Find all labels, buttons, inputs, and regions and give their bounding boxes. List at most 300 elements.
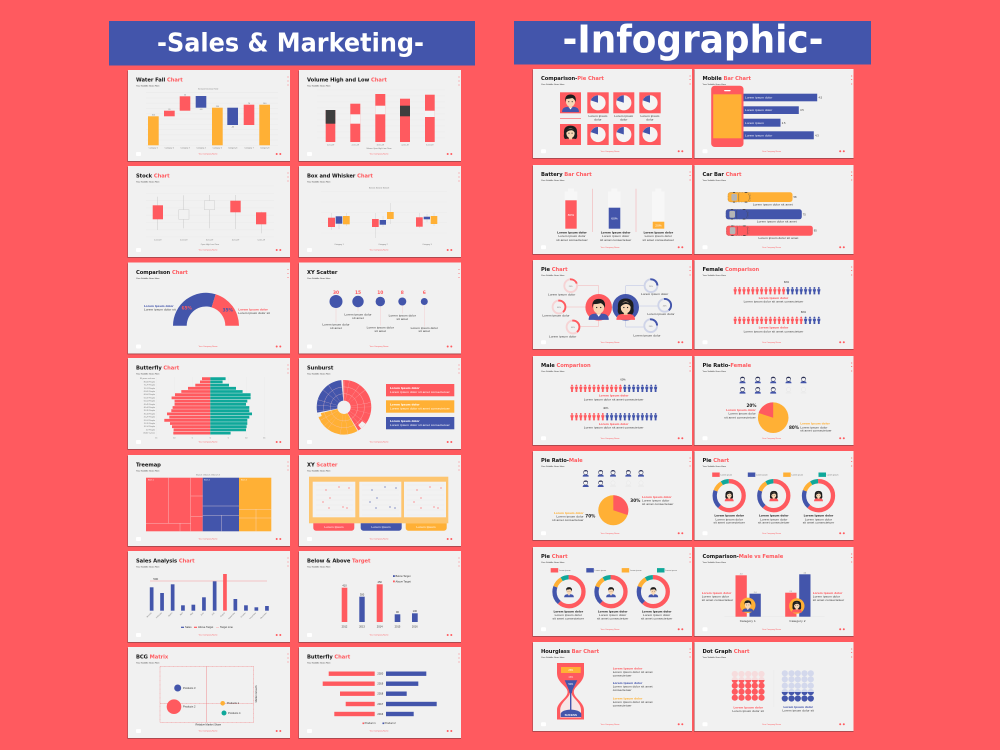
- waterfall bars: Category 1: [149, 146, 158, 149]
- batteries: 60%: [611, 216, 618, 220]
- label 80%: Lorem Ipsum dolor: [800, 422, 830, 426]
- ring labels: Lorem Ipsum dolor: [759, 514, 789, 518]
- panel: dot graph chart: [694, 642, 854, 732]
- population pyramid: 85 years and over: [140, 377, 155, 380]
- label 30%: 30%: [630, 498, 641, 503]
- population pyramid: 30-34 People: [144, 413, 155, 415]
- panel: sales analysis chart: Sales Analysis Chart: [136, 558, 195, 564]
- comparison labels: 40%: [603, 406, 609, 410]
- candlestick chart: 5-Oct-19: [258, 239, 265, 242]
- text block: red: consectetuer: [613, 674, 632, 678]
- scatter pill labels: Lorem Ipsum: [371, 525, 391, 529]
- bubble stems and circles: 10: [377, 290, 383, 296]
- horizontal bars: Lorem ipsum dolor: [745, 96, 772, 100]
- panel: pie chart with male avatars: [532, 547, 692, 637]
- pictogram row 40%: [570, 413, 657, 420]
- legend swatches: Lorem ipsum: [756, 474, 768, 476]
- comparison labels: [744, 280, 807, 333]
- icon row: male: [583, 470, 644, 487]
- panel: volume high and low chart: Volume High and Low Chart: [307, 77, 387, 83]
- population pyramid: 50-54 People: [144, 401, 155, 403]
- panel: sunburst: Your Company Name: [369, 442, 389, 444]
- target bars: 2016: [412, 624, 418, 628]
- panel: XY scatter bubbles: Your Company Name: [369, 346, 389, 348]
- panel: hourglass bar chart: [532, 642, 692, 732]
- panel: sales analysis chart: Your Company Name: [198, 635, 218, 637]
- half donut: [173, 293, 239, 326]
- population pyramid: 55-59 People: [144, 397, 155, 399]
- box plots: Category 1: [334, 243, 344, 246]
- ring labels: sit amet consectetuer: [803, 521, 834, 525]
- bubble stems and circles: 15: [355, 290, 361, 296]
- label 80%: 80%: [789, 425, 800, 430]
- population pyramid: 20-24 People: [144, 420, 155, 422]
- hourglass: 50%: [568, 683, 574, 686]
- car bars: [726, 192, 817, 240]
- ring labels: 40%: [663, 305, 667, 307]
- ring labels: 20%: [569, 286, 573, 288]
- ring labels: Lorem ipsum dolor: [542, 314, 570, 318]
- dot labels: Lorem ipsum dolor sit: [732, 709, 764, 713]
- panel: XY scatter triple: XY Scatter: [307, 462, 338, 468]
- candlestick chart: Open High Low Close: [201, 244, 219, 246]
- population pyramid: 15: [155, 437, 157, 439]
- waterfall bars: 50: [184, 94, 186, 96]
- waterfall bars: 140: [263, 103, 266, 105]
- population pyramid: [140, 377, 265, 439]
- panel: comparison male vs female: Your Subtitle Goes Here: [702, 561, 727, 564]
- panel: female comparison: Female Comparison: [702, 267, 760, 273]
- panel: butterfly population chart: [127, 358, 290, 450]
- text block: blue: Lorem Ipsum dolor: [613, 681, 643, 685]
- banner: Infographic: -Infographic-: [562, 18, 824, 62]
- panel: pie chart with male avatars: Pie Chart: [541, 554, 568, 560]
- text block: blue: [613, 681, 653, 692]
- grouped bars: 4.3: [740, 573, 742, 575]
- ring labels: Lorem Ipsum dolor: [553, 609, 584, 613]
- car bars: 58: [794, 195, 797, 199]
- label 80%: [789, 422, 832, 433]
- text block: blue: consectetuer: [613, 688, 632, 692]
- panel: pie chart with male avatars: Your Subtitle Goes Here: [541, 561, 565, 564]
- ring labels: Lorem ipsum dolor: [633, 333, 661, 337]
- bubble labels: Lorem ipsum dolor: [411, 326, 438, 330]
- horizontal bars: 4.5: [818, 96, 823, 100]
- panel: mobile bar chart: Mobile Bar Chart: [702, 76, 751, 82]
- grouped bars: 2.4: [754, 592, 756, 594]
- dot labels: Lorem Ipsum dolor: [733, 705, 764, 709]
- sales legend: Sales: [185, 625, 192, 629]
- panel: BCG matrix: BCG Matrix: [136, 654, 169, 660]
- batteries: [565, 189, 665, 229]
- target legend: [393, 574, 411, 583]
- volume bars: 1-Oct-19: [327, 143, 334, 146]
- legend swatches: Lorem ipsum: [792, 474, 803, 476]
- icon row: female: [740, 377, 806, 394]
- sales bars with target line: July: [212, 612, 215, 616]
- bubble labels: sit amet: [352, 316, 364, 320]
- panel: XY scatter triple: [298, 455, 461, 547]
- dividers: [592, 189, 636, 232]
- panel: pie ratio male: Your Company Name: [600, 533, 620, 535]
- panel: comparison pie chart: Your Subtitle Goes Here: [541, 83, 565, 86]
- comparison labels: Lorem Ipsum dolor: [599, 394, 629, 398]
- panel: car bar chart: Car Bar Chart: [702, 172, 742, 178]
- panel: comparison pie chart: Your Company Name: [600, 151, 620, 153]
- panel: mobile bar chart: Your Subtitle Goes Here: [702, 83, 727, 86]
- panel: butterfly population chart: Your Subtitle Goes Here: [136, 372, 160, 375]
- ring labels: Lorem Ipsum dolor: [714, 514, 745, 518]
- right label: Lorem ipsum dolor: [813, 594, 840, 598]
- ring labels: Lorem Ipsum dolor: [804, 514, 834, 518]
- pie: 20 / 80: [758, 402, 788, 433]
- panel: below and above target: [298, 551, 461, 643]
- panel: pie ratio male: Pie Ratio-Male: [541, 458, 583, 464]
- treemap blocks: Branch 1 Branch 2 Branch 3: [196, 474, 220, 477]
- right label: Lorem Ipsum dolor: [813, 591, 843, 595]
- panel: pie chart with female avatars: Your Subtitle Goes Here: [702, 465, 727, 468]
- label 30%: Lorem Ipsum dolor: [642, 495, 672, 499]
- pie squares: [587, 92, 661, 145]
- right label: sit amet consectetuer: [813, 598, 844, 602]
- horizontal bars: Lorem ipsum: [745, 121, 764, 125]
- comparison labels: Lorem ipsum dolor sit amet consectetuer: [584, 426, 644, 430]
- bubble stems and circles: 30: [333, 290, 339, 296]
- panel: pie ratio female: Your Subtitle Goes Here: [702, 370, 727, 373]
- population pyramid: 80-84 People: [144, 381, 155, 383]
- ring labels: [553, 609, 672, 620]
- panel: comparison pie chart: Comparison-Pie Chart: [541, 76, 604, 82]
- target bars: [342, 580, 418, 628]
- volume bars: Volume Open High Low Close: [366, 148, 392, 150]
- waterfall bars: 70: [248, 103, 250, 105]
- waterfall bars: 130: [216, 106, 219, 108]
- candlestick chart: 4-Oct-19: [232, 239, 239, 242]
- waterfall bars: -40: [200, 109, 202, 111]
- panel: BCG matrix: Your Company Name: [198, 731, 218, 733]
- label 30%: [630, 495, 674, 506]
- sales bars with target line: January: [146, 612, 152, 618]
- panel: comparison pie chart: [532, 69, 692, 159]
- panel: pie ratio female: [694, 356, 854, 446]
- legend swatches: Lorem ipsum: [630, 570, 642, 572]
- panel: battery bar chart: [532, 165, 692, 255]
- panel: male comparison: [532, 356, 692, 446]
- ring labels: Lorem ipsum dolor: [641, 292, 668, 296]
- text block: yellow: consectetuer: [613, 704, 632, 708]
- battery labels: sit amet consectetuer: [643, 238, 674, 242]
- panel: below and above target: Below & Above Target: [307, 558, 371, 564]
- panel: sunburst: [298, 358, 461, 450]
- panel: XY scatter bubbles: XY Scatter: [307, 270, 338, 276]
- target bars: 410: [342, 583, 347, 587]
- volume bars: 5-Oct-19: [426, 143, 433, 146]
- grouped bars: 4.4: [803, 572, 806, 574]
- ring labels: Lorem ipsum dolor: [599, 613, 626, 617]
- pie squares: Lorem ipsum: [589, 114, 608, 118]
- panel: treemap: [127, 455, 290, 547]
- battery labels: Lorem Ipsum dolor: [557, 231, 587, 235]
- bubble labels: Lorem ipsum dolor: [389, 314, 416, 318]
- candlestick chart: 1-Oct-19: [154, 239, 161, 242]
- left label: Lorem ipsum dolor sit: [144, 308, 176, 312]
- bubbles and products: Products 2: [183, 705, 196, 709]
- candlestick chart: 3-Oct-19: [206, 239, 213, 242]
- comparison labels: Lorem Ipsum dolor: [599, 422, 629, 426]
- panel: comparison half donut chart: Your Subtitle Goes Here: [136, 277, 160, 280]
- text block: red: Lorem ipsum dolor sit amet: [613, 670, 653, 674]
- progress rings: male: [553, 279, 579, 333]
- box plots: [321, 187, 447, 246]
- panel: sunburst: Sunburst: [307, 365, 334, 371]
- panel: pie chart with female avatars: Your Company Name: [762, 533, 782, 535]
- volume bars: 4-Oct-19: [401, 143, 409, 146]
- sales bars with target line: [146, 574, 269, 620]
- waterfall bars: Category 6: [228, 146, 237, 149]
- panel: mobile bar chart: Your Company Name: [762, 151, 782, 153]
- avatar: man and woman: [585, 294, 639, 321]
- sales bars with target line: February: [155, 612, 163, 619]
- treemap blocks: Stem 3: [241, 479, 247, 482]
- sales bars with target line: November: [249, 611, 257, 620]
- icon badges: [740, 598, 804, 614]
- panel: treemap: Treemap: [136, 462, 161, 468]
- candlestick chart: [146, 186, 274, 246]
- right label: Lorem Ipsum dolor: [238, 308, 269, 312]
- car bars: Lorem ipsum dolor sit amet: [757, 219, 797, 223]
- text block: red: Lorem Ipsum dolor: [613, 666, 643, 670]
- legend box: yellow: [386, 400, 454, 413]
- comparison labels: Lorem ipsum dolor sit amet consectetuer: [584, 397, 644, 401]
- population pyramid: 15-19 People: [144, 423, 155, 425]
- panel: volume high and low chart: [298, 70, 461, 162]
- treemap blocks: [146, 474, 271, 531]
- waterfall bars: Category 3: [180, 146, 190, 149]
- battery labels: Lorem Ipsum dolor: [643, 231, 674, 235]
- panel: pie chart with female avatars: Pie Chart: [702, 458, 730, 464]
- mirrored bars: 2019: [377, 682, 384, 686]
- text block: yellow: Lorem Ipsum dolor: [613, 696, 643, 700]
- text block: yellow: [613, 696, 653, 708]
- volume bars: 3-Oct-19: [377, 143, 384, 146]
- right label: Lorem ipsum dolor sit: [238, 311, 270, 315]
- text block: blue: Lorem ipsum dolor sit amet: [613, 684, 653, 688]
- pictogram row 60%: [570, 385, 657, 392]
- target bars: 100: [413, 609, 418, 613]
- mirrored bars: 2017: [377, 702, 384, 706]
- population pyramid: 0: [210, 437, 211, 439]
- ring labels: Lorem ipsum dolor: [555, 613, 582, 617]
- panel: male comparison: Your Company Name: [600, 438, 620, 440]
- panel: car bar chart: Your Company Name: [762, 247, 782, 249]
- legend box: yellow: Lorem Ipsum dolor: [390, 402, 420, 406]
- label 20%: 20%: [746, 403, 757, 408]
- waterfall bars: Category 7: [244, 146, 254, 149]
- battery labels: Lorem ipsum dolor: [602, 234, 629, 238]
- comparison labels: Lorem ipsum dolor sit amet consectetuer: [744, 300, 803, 304]
- batteries: 20%: [655, 223, 662, 227]
- legend swatches: [551, 568, 677, 572]
- panel: box and whisker chart: Your Company Name: [369, 250, 389, 252]
- text block: yellow: Lorem ipsum dolor sit amet: [613, 700, 653, 704]
- bubble labels: sit amet: [330, 326, 342, 330]
- label 70%: Lorem ipsum dolor: [556, 514, 584, 518]
- panel: dot graph chart: Your Company Name: [762, 724, 782, 726]
- legend swatches: Lorem ipsum: [559, 570, 571, 572]
- panel: pie chart with male avatars: Your Company Name: [600, 629, 620, 631]
- sunburst rings: [318, 382, 370, 433]
- target bars: 90: [396, 610, 399, 614]
- ring labels: sit amet consectetuer: [597, 616, 628, 620]
- hourglass: [557, 663, 584, 720]
- label 20%: Lorem Ipsum dolor: [726, 408, 756, 412]
- bubbles and products: [167, 684, 241, 716]
- label 70%: Lorem Ipsum dolor: [554, 511, 584, 515]
- label 70%: [552, 511, 596, 522]
- panel: treemap: Your Company Name: [198, 539, 218, 541]
- pie: 30 / 70: [598, 495, 628, 525]
- target bars: 2013: [359, 624, 365, 628]
- bubble labels: sit amet: [396, 317, 408, 321]
- bubble stems and circles: 6: [423, 290, 426, 296]
- waterfall bars: -60: [231, 126, 234, 128]
- ring labels: sit amet consectetuer: [553, 616, 584, 620]
- sales bars with target line: April: [179, 611, 184, 616]
- left label: Lorem Ipsum dolor: [144, 304, 174, 308]
- progress rings: female: [644, 279, 671, 332]
- panel: treemap: Your Subtitle Goes Here: [136, 469, 160, 472]
- sales bars with target line: 500: [153, 577, 159, 581]
- panel: water fall chart: Your Subtitle Goes Here: [136, 84, 160, 87]
- panel: male comparison: Male Comparison: [541, 363, 591, 369]
- ring labels: Lorem ipsum dolor: [647, 312, 675, 316]
- bubble labels: Lorem ipsum dolor: [322, 323, 350, 327]
- half donut: 65%: [181, 306, 193, 312]
- panel: box and whisker chart: Your Subtitle Goes Here: [307, 180, 331, 183]
- label 30%: sit amet consectetuer: [642, 502, 674, 506]
- waterfall bars: Category 8: [260, 146, 269, 149]
- sales bars with target line: October: [240, 611, 247, 618]
- panel: comparison half donut chart: Comparison Chart: [136, 270, 188, 276]
- panel: below and above target: Your Subtitle Goes Here: [307, 565, 331, 568]
- battery labels: Lorem Ipsum dolor: [601, 231, 631, 235]
- ring labels: sit amet consectetuer: [641, 616, 672, 620]
- comparison labels: [584, 378, 644, 430]
- bubbles and products: Products 3: [183, 686, 196, 690]
- panel: stock chart: Your Company Name: [198, 250, 218, 252]
- waterfall bars: Increase Decrease Total: [198, 88, 219, 91]
- treemap blocks: Stem 1: [148, 479, 154, 482]
- matrix grid: Relative Market Share: [195, 723, 222, 727]
- scatter backdrop and plots: [309, 477, 448, 523]
- right label: [813, 591, 844, 602]
- panel: XY scatter bubbles: [298, 262, 461, 354]
- bubble labels: [322, 313, 438, 333]
- ring labels: sit amet consectetuer: [758, 521, 790, 525]
- volume bars: [317, 90, 445, 150]
- legend box: red: [386, 384, 454, 396]
- panel: car bar chart: Your Subtitle Goes Here: [702, 179, 727, 182]
- panel: comparison half donut chart: [127, 262, 290, 354]
- grouped bars: 2.5: [789, 591, 792, 593]
- population pyramid: 15: [263, 437, 265, 439]
- left label: Lorem ipsum dolor: [702, 594, 729, 598]
- car bars: 95: [814, 229, 817, 233]
- mirrored bars: 2016: [377, 712, 384, 716]
- panel: XY scatter triple: Your Company Name: [369, 539, 389, 541]
- panel: female comparison: [694, 260, 854, 350]
- grouped bars: Category 1: [740, 619, 756, 623]
- target bars: 2014: [377, 624, 383, 628]
- waterfall bars: Category 2: [165, 146, 174, 149]
- bubble labels: Lorem ipsum dolor: [367, 326, 394, 330]
- waterfall bars: [146, 88, 278, 149]
- panel: male comparison: Your Subtitle Goes Here: [541, 370, 565, 373]
- comparison labels: Lorem Ipsum dolor: [759, 326, 789, 330]
- bubble labels: Lorem ipsum dolor: [344, 313, 372, 317]
- sales bars with target line: August: [219, 611, 226, 618]
- dot grid: red: [732, 671, 765, 701]
- comparison labels: 80%: [801, 310, 807, 314]
- panel: comparison half donut chart: Your Company Name: [198, 346, 218, 348]
- sales bars with target line: May: [190, 612, 194, 616]
- battery labels: Lorem ipsum dolor: [645, 234, 672, 238]
- panel: dot graph chart: Dot Graph Chart: [702, 649, 750, 655]
- sales legend: Target Line: [220, 625, 233, 629]
- pie squares: Lorem ipsum: [614, 114, 634, 118]
- mirrored bars: [323, 672, 437, 716]
- sales bars with target line: December: [259, 611, 268, 620]
- label 30%: Lorem ipsum dolor: [642, 498, 669, 502]
- panel: XY scatter bubbles: Your Subtitle Goes Here: [307, 277, 331, 280]
- panel: pie ratio male: Your Subtitle Goes Here: [541, 465, 565, 468]
- panel: butterfly bar chart: Butterfly Chart: [307, 654, 351, 660]
- left label: [702, 591, 733, 602]
- panel: pie chart with avatars: Your Subtitle Goes Here: [541, 274, 565, 277]
- panel: pie ratio female: Your Company Name: [762, 438, 782, 440]
- battery labels: sit amet consectetuer: [556, 238, 588, 242]
- bubbles and products: Products 4: [228, 711, 241, 715]
- label 20%: Lorem ipsum dolor: [728, 412, 756, 416]
- panel: battery bar chart: Your Company Name: [600, 247, 620, 249]
- panel: butterfly bar chart: Your Subtitle Goes Here: [307, 661, 331, 664]
- legend swatches: Lorem ipsum: [827, 474, 839, 476]
- panel: hourglass bar chart: Hourglass Bar Chart: [541, 649, 600, 655]
- panel: comparison male vs female: Comparison-Male vs Female: [702, 554, 784, 560]
- panel: car bar chart: [694, 165, 854, 255]
- legend swatches: [712, 472, 839, 477]
- hourglass: 25%: [568, 669, 574, 672]
- panel: BCG matrix: [127, 647, 290, 739]
- population pyramid: 40-44 People: [144, 407, 155, 409]
- target legend: Above Target: [396, 579, 411, 583]
- panel: box and whisker chart: Box and Whisker Chart: [307, 173, 373, 179]
- pie squares: dolor: [620, 118, 627, 122]
- label 20%: sit amet consectetuer: [724, 415, 756, 419]
- panel: water fall chart: Your Company Name: [198, 154, 218, 156]
- products legend: [362, 721, 396, 725]
- comparison labels: Lorem ipsum dolor sit amet consectetuer: [744, 329, 803, 333]
- legend box: blue: Lorem ipsum dolor sit amet consectetuer: [390, 423, 450, 427]
- products legend: Product 1: [365, 721, 376, 725]
- battery labels: sit amet consectetuer: [600, 238, 631, 242]
- panel: sunburst: Your Subtitle Goes Here: [307, 372, 331, 375]
- target bars: 300: [360, 592, 365, 596]
- horizontal bars: [744, 94, 823, 139]
- panel: pie ratio male: [532, 451, 692, 541]
- legend swatches: Lorem ipsum: [665, 570, 677, 572]
- dot grid: blue: [782, 670, 814, 702]
